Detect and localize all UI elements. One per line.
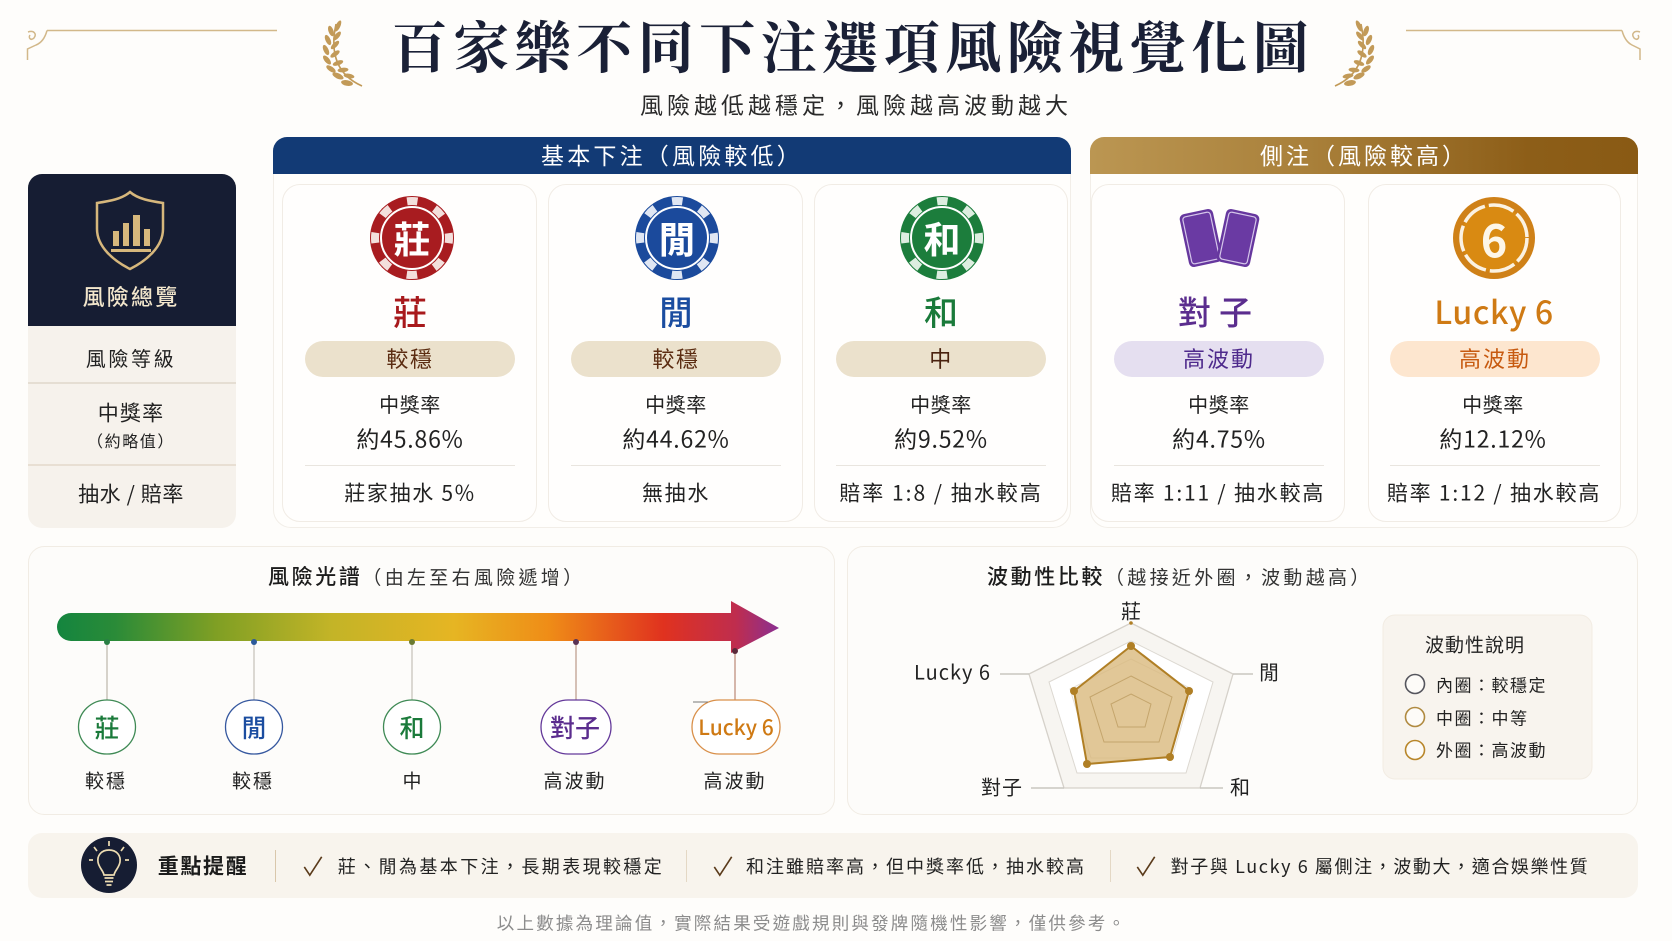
axis labels [914, 596, 1279, 800]
radar chart [1000, 621, 1253, 788]
overview label: 風險總覽 [83, 280, 179, 312]
corner ornament: top left [26, 30, 277, 60]
legend box: 內圈：較穩定 [1436, 672, 1547, 696]
win rate label: 中獎率 [379, 389, 441, 418]
win rate label: 中獎率 [1462, 389, 1524, 418]
card name: 對子 [1178, 286, 1260, 334]
legend box: 外圈：高波動 [1436, 736, 1547, 762]
marker: banker: 較穩 [85, 766, 127, 794]
risk pill: 較穩 [386, 342, 434, 374]
marker: tie: 和 [399, 709, 425, 745]
icon: red chip: 莊 [394, 210, 430, 264]
marker: lucky 6 [692, 648, 780, 794]
marker: tie [384, 639, 440, 794]
corner ornament: top right [1406, 30, 1641, 60]
win rate label: 中獎率 [910, 389, 972, 418]
risk pill: 較穩 [652, 342, 700, 374]
card: banker [282, 184, 537, 522]
marker: lucky 6: 高波動 [703, 766, 767, 794]
heading: basic bets: 基本下注（風險較低） [541, 137, 803, 171]
marker: lucky 6: Lucky 6 [698, 712, 774, 742]
icon: green chip [900, 196, 984, 280]
commission note: 莊家抽水 5% [344, 478, 476, 508]
row: win rate: 中獎率 [98, 398, 164, 428]
icon: blue chip [635, 196, 719, 280]
panel: volatility radar [847, 546, 1638, 815]
axis labels: 莊 [1121, 596, 1141, 624]
risk pill: 高波動 [1459, 342, 1531, 374]
row divider 1 [28, 382, 236, 384]
panel: side bets frame [1090, 174, 1638, 528]
overview header [28, 174, 236, 326]
icon: red chip [370, 196, 454, 280]
icon: right laurel [1334, 20, 1374, 87]
card: pair [1091, 184, 1345, 522]
icon: shield chart [96, 190, 164, 270]
odds note: 賠率 1:11 / 抽水較高 [1111, 478, 1325, 508]
icon: left laurel [322, 20, 362, 87]
spectrum title: 風險光譜（由左至右風險遞增） [268, 561, 585, 591]
legend box [1383, 615, 1592, 779]
marker: player: 較穩 [232, 766, 274, 794]
marker: pair [541, 639, 611, 794]
card name: 和 [924, 286, 958, 335]
risk pill [305, 341, 515, 377]
marker: pair: 對子 [550, 709, 600, 745]
risk pill: 中 [929, 342, 953, 374]
card name: Lucky 6 [1434, 288, 1554, 334]
card: lucky 6 [1368, 184, 1621, 522]
card: tie [814, 184, 1068, 522]
radar title: 波動性比較（越接近外圈，波動越高） [987, 561, 1373, 591]
footnote: 以上數據為理論值，實際結果受遊戲規則與發牌隨機性影響，僅供參考。 [497, 910, 1127, 935]
icon: check 3 [1136, 856, 1156, 877]
icon: blue chip: 閒 [658, 210, 696, 264]
row: risk level: 風險等級 [86, 343, 176, 372]
row: commission and odds: 抽水 / 賠率 [78, 478, 184, 508]
marker: player [226, 639, 282, 794]
win rate value: 約45.86% [356, 420, 464, 454]
callout: key reminders [28, 833, 1638, 898]
panel: basic bets frame [273, 174, 1071, 528]
win rate value: 約9.52% [894, 420, 988, 454]
reminder 3: 對子與 Lucky 6 屬側注，波動大，適合娛樂性質 [1171, 853, 1589, 879]
icon: check 1 [304, 856, 322, 877]
icon: light bulb [81, 837, 137, 893]
subtitle: 風險越低越穩定，風險越高波動越大 [640, 86, 1072, 120]
axis labels: 對子 [981, 772, 1023, 800]
win rate value: 約44.62% [622, 420, 730, 454]
panel: risk spectrum [28, 546, 835, 815]
win rate label: 中獎率 [645, 389, 707, 418]
icon: check 2 [714, 856, 732, 877]
marker: banker: 莊 [94, 709, 120, 745]
win rate value: 約12.12% [1439, 420, 1547, 454]
heading: side bets [1090, 137, 1638, 174]
reminder 2: 和注雖賠率高，但中獎率低，抽水較高 [746, 853, 1086, 879]
odds note: 賠率 1:8 / 抽水較高 [839, 478, 1043, 508]
risk pill [836, 341, 1046, 377]
axis labels: Lucky 6 [914, 656, 991, 686]
icon: two purple cards [1180, 209, 1260, 267]
icon: orange chip: 6 [1481, 206, 1507, 270]
commission note: 無抽水 [642, 478, 710, 508]
card name: 莊 [393, 286, 427, 335]
marker: banker [78, 639, 136, 794]
icon: orange chip [1453, 197, 1535, 279]
legend box: 波動性說明 [1425, 630, 1525, 658]
row divider 2 [28, 464, 236, 466]
heading: side bets: 側注（風險較高） [1260, 137, 1468, 171]
risk pill [571, 341, 781, 377]
icon: green chip: 和 [924, 210, 960, 264]
risk pill [1114, 341, 1324, 377]
row: approx note: （約略值） [87, 428, 175, 452]
axis labels: 閒 [1259, 656, 1279, 686]
heading: basic bets [273, 137, 1071, 174]
win rate value: 約4.75% [1172, 420, 1266, 454]
risk pill [1390, 341, 1600, 377]
odds note: 賠率 1:12 / 抽水較高 [1387, 478, 1601, 508]
reminder 1: 莊、閒為基本下注，長期表現較穩定 [338, 853, 664, 879]
marker: tie: 中 [402, 766, 422, 794]
win rate label: 中獎率 [1188, 389, 1250, 418]
panel: risk overview row labels [28, 174, 236, 528]
risk pill: 高波動 [1183, 342, 1255, 374]
reminder heading: 重點提醒 [158, 850, 248, 880]
spectrum arrow [57, 601, 779, 653]
marker: pair: 高波動 [543, 766, 607, 794]
title: 百家樂不同下注選項風險視覺化圖 [392, 5, 1314, 85]
axis labels: 和 [1230, 772, 1250, 800]
legend box: 中圈：中等 [1436, 704, 1528, 730]
data polygon [1074, 646, 1189, 764]
card name: 閒 [659, 286, 693, 335]
card: player [548, 184, 803, 522]
marker: player: 閒 [241, 709, 267, 745]
